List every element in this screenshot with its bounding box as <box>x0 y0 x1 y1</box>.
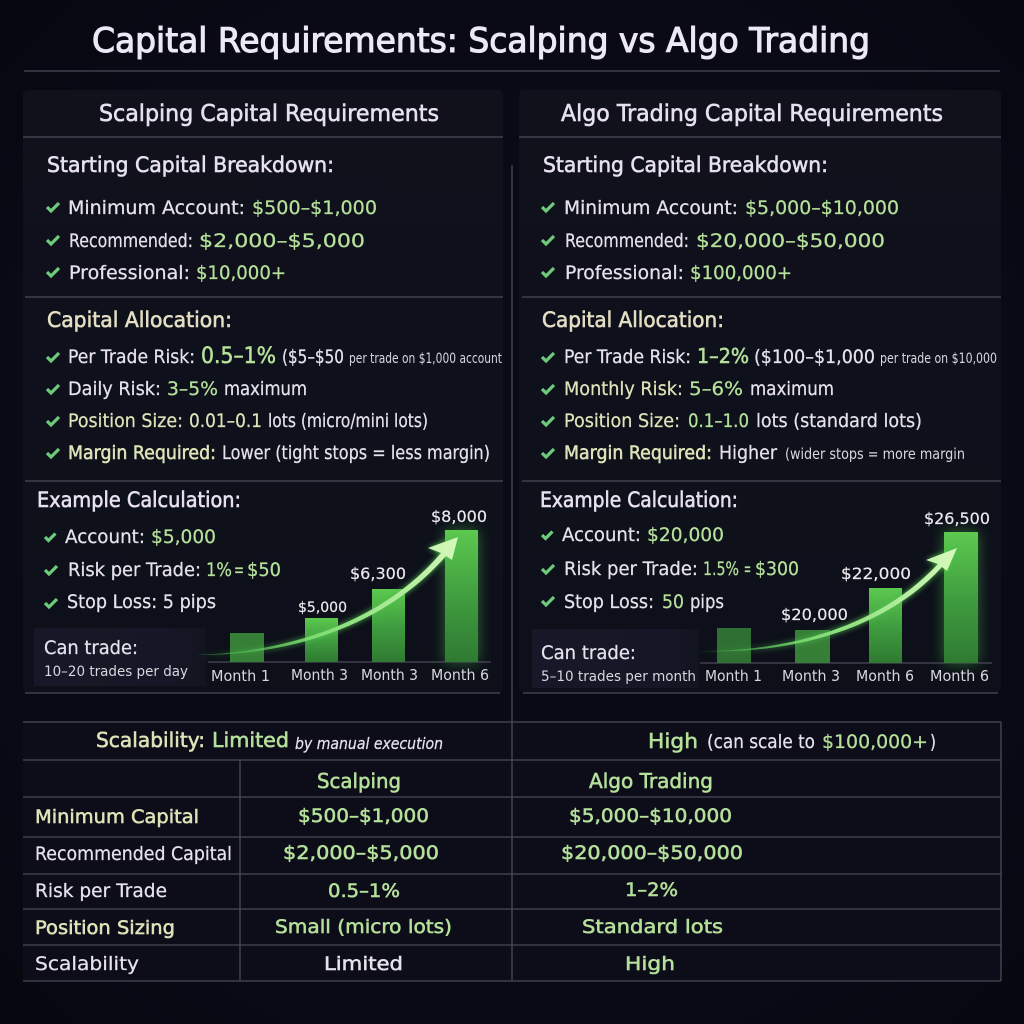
panel: algo trading capital requirements <box>519 90 1001 693</box>
scalability summary: algo: ) <box>930 731 936 753</box>
item: account: Account: <box>65 526 145 548</box>
item: per trade risk: 0.5–1% <box>201 344 276 369</box>
heading: capital allocation: Capital Allocation: <box>542 308 724 332</box>
item: per trade risk <box>542 344 997 368</box>
table header: Scalping <box>317 769 401 793</box>
scalability summary: algo <box>648 729 936 753</box>
item: per trade risk: ($5–$50 <box>282 346 344 368</box>
item: per trade risk: Per Trade Risk: <box>68 346 195 368</box>
item: risk per trade: 1% <box>206 559 232 581</box>
item: margin required: Lower (tight stops = less margin) <box>222 442 490 464</box>
value labels: $6,300 <box>350 564 406 583</box>
item: daily risk: maximum <box>224 378 307 400</box>
item: margin required: Margin Required: <box>68 442 216 464</box>
value labels: $8,000 <box>431 507 487 526</box>
item: daily risk: Daily Risk: <box>68 378 161 400</box>
item: risk per trade: Risk per Trade: <box>564 558 698 580</box>
item: per trade risk: ($100–$1,000 <box>754 346 875 368</box>
item: daily risk: 3–5% <box>167 378 218 400</box>
row: position sizing: Small (micro lots) <box>275 916 452 938</box>
item: margin required <box>542 442 965 464</box>
item: margin required <box>47 442 490 464</box>
item: risk per trade: Risk per Trade: <box>68 559 201 581</box>
bar: month 6 second <box>944 532 978 663</box>
item: position size <box>47 410 428 432</box>
item: per trade risk: 1–2% <box>697 344 749 368</box>
item: professional: Professional: <box>565 262 684 284</box>
row: recommended capital: $2,000–$5,000 <box>283 842 439 864</box>
item: monthly risk <box>542 378 834 400</box>
bar: month 6 <box>869 588 902 663</box>
value labels <box>781 509 990 624</box>
item: professional <box>47 262 286 284</box>
bar: month 6 <box>445 530 478 662</box>
section: starting capital breakdown <box>47 153 377 284</box>
item: account <box>45 526 216 548</box>
item: recommended: $2,000–$5,000 <box>199 230 365 252</box>
bar: month 3 <box>305 618 338 662</box>
callout: can trade <box>532 629 699 688</box>
item: risk per trade: = <box>234 559 244 581</box>
item: position size: Position Size: <box>564 410 680 432</box>
month labels: Month 3 <box>361 666 418 684</box>
title: Capital Requirements: Scalping vs Algo Trading <box>92 21 870 61</box>
item: minimum account: Minimum Account: <box>564 197 738 219</box>
row: minimum capital <box>35 805 732 828</box>
row: recommended capital: Recommended Capital <box>35 843 232 865</box>
panel heading: algo trading: Algo Trading Capital Requirements <box>561 101 943 127</box>
item: per trade risk: Per Trade Risk: <box>564 346 691 368</box>
item: account: Account: <box>562 524 641 546</box>
heading: starting capital: Starting Capital Breakdown: <box>47 153 334 177</box>
item: risk per trade: = <box>744 558 751 580</box>
month labels: Month 3 <box>782 667 840 685</box>
item: monthly risk: 5–6% <box>689 378 743 400</box>
item: position size: lots (micro/mini lots) <box>268 410 428 432</box>
item: stop loss <box>542 591 724 613</box>
row: risk per trade: Risk per Trade <box>35 880 167 902</box>
item: recommended: $20,000–$50,000 <box>696 230 885 252</box>
section: starting capital breakdown <box>542 153 899 284</box>
item: stop loss: pips <box>690 591 724 613</box>
item: risk per trade: 1.5% <box>703 558 739 580</box>
item: stop loss: 50 <box>662 591 684 613</box>
comparison table <box>23 165 1001 981</box>
item: stop loss: Stop Loss: <box>564 591 654 613</box>
scalability summary: scalping: by manual execution <box>295 734 443 753</box>
bar: month 3 <box>795 630 830 663</box>
item: recommended: Recommended: <box>69 230 193 252</box>
item: margin required: (wider stops = more margin <box>785 445 965 463</box>
item: account: $20,000 <box>647 524 724 546</box>
row: position sizing <box>35 916 723 939</box>
item: margin required: Higher <box>719 442 777 464</box>
row: minimum capital: $500–$1,000 <box>298 805 429 827</box>
row: position sizing: Standard lots <box>582 916 723 938</box>
item: professional: $10,000+ <box>196 262 286 284</box>
month labels: Month 1 <box>705 667 762 685</box>
item: minimum account: $500–$1,000 <box>252 197 377 219</box>
item: per trade risk <box>47 344 502 369</box>
table grid <box>23 165 1001 981</box>
scalability summary: scalping: Limited <box>212 728 289 752</box>
arrow: growth trend <box>697 548 957 651</box>
scalability summary: scalping: Scalability: <box>96 728 205 752</box>
arrow: growth trend <box>195 537 458 655</box>
callout: can trade: 5–10 trades per month <box>541 669 696 685</box>
row: minimum capital: Minimum Capital <box>35 806 199 828</box>
item: daily risk <box>47 378 307 400</box>
bar: month 3 second <box>372 589 405 662</box>
row: scalability: Limited <box>324 953 403 975</box>
value labels: $5,000 <box>298 600 347 616</box>
item: recommended: Recommended: <box>565 230 689 252</box>
item: risk per trade: $300 <box>755 558 799 580</box>
item: risk per trade <box>45 559 281 581</box>
row: scalability: High <box>625 953 675 975</box>
item: position size: 0.1–1.0 <box>688 410 749 432</box>
scalability summary: algo: High <box>648 729 698 753</box>
bar: month 1 <box>230 633 264 662</box>
section: capital allocation <box>47 308 502 464</box>
callout: can trade: Can trade: <box>541 642 636 664</box>
value labels: $20,000 <box>781 605 848 624</box>
value labels <box>298 507 487 616</box>
item: minimum account <box>542 197 899 219</box>
row: scalability: Scalability <box>35 953 139 975</box>
item: position size: lots (standard lots) <box>756 410 922 432</box>
item: recommended <box>47 230 365 252</box>
item: recommended <box>542 230 885 252</box>
item: monthly risk: maximum <box>750 378 834 400</box>
scalability summary: algo: $100,000+ <box>822 731 928 753</box>
row: recommended capital: $20,000–$50,000 <box>561 842 743 864</box>
bar chart: algo account growth <box>697 509 992 685</box>
month labels: Month 6 <box>856 667 914 685</box>
item: risk per trade: $50 <box>247 559 281 581</box>
value labels: $26,500 <box>924 509 990 528</box>
row: risk per trade: 0.5–1% <box>328 880 400 902</box>
row: recommended capital <box>35 842 743 865</box>
item: risk per trade <box>542 558 799 580</box>
row: risk per trade <box>35 879 678 902</box>
table header <box>317 769 713 793</box>
item: professional: Professional: <box>69 262 190 284</box>
item: position size <box>542 410 922 432</box>
value labels: $22,000 <box>841 564 911 583</box>
panel heading: scalping: Scalping Capital Requirements <box>99 101 439 127</box>
row: scalability <box>35 953 675 975</box>
month labels <box>705 667 989 685</box>
callout: can trade: Can trade: <box>44 637 138 659</box>
scalability summary: algo: (can scale to <box>707 731 815 753</box>
item: minimum account <box>47 197 377 219</box>
month labels: Month 6 <box>930 667 989 685</box>
scalability summary: scalping <box>96 728 443 753</box>
row: risk per trade: 1–2% <box>625 879 678 901</box>
heading: capital allocation: Capital Allocation: <box>47 308 232 332</box>
heading: example calculation: Example Calculation: <box>37 488 241 512</box>
item: per trade risk: per trade on $1,000 account <box>349 351 502 367</box>
item: professional <box>542 262 792 284</box>
month labels: Month 1 <box>211 667 270 685</box>
item: monthly risk: Monthly Risk: <box>564 378 683 400</box>
callout: can trade <box>34 628 206 686</box>
month labels <box>211 666 489 685</box>
row: minimum capital: $5,000–$10,000 <box>569 805 732 827</box>
month labels: Month 6 <box>431 666 489 684</box>
section: example calculation <box>34 488 491 686</box>
item: minimum account: $5,000–$10,000 <box>745 197 899 219</box>
table header: Algo Trading <box>589 769 713 793</box>
row: position sizing: Position Sizing <box>35 917 175 939</box>
item: account <box>542 524 724 546</box>
bar chart: scalping account growth <box>195 507 491 685</box>
item: position size: Position Size: <box>68 410 183 432</box>
item: stop loss: Stop Loss: 5 pips <box>67 591 216 613</box>
month labels: Month 3 <box>291 666 348 684</box>
section: example calculation <box>532 488 992 688</box>
item: account: $5,000 <box>151 526 216 548</box>
heading: starting capital: Starting Capital Breakdown: <box>543 153 828 177</box>
callout: can trade: 10–20 trades per day <box>44 664 188 680</box>
heading: example calculation: Example Calculation: <box>540 488 738 512</box>
item: margin required: Margin Required: <box>564 442 712 464</box>
section: capital allocation <box>542 308 997 464</box>
item: professional: $100,000+ <box>690 262 792 284</box>
item: minimum account: Minimum Account: <box>68 197 245 219</box>
item: position size: 0.01–0.1 <box>189 410 262 432</box>
bar: month 1 <box>717 628 751 663</box>
panel: scalping capital requirements <box>23 90 503 693</box>
